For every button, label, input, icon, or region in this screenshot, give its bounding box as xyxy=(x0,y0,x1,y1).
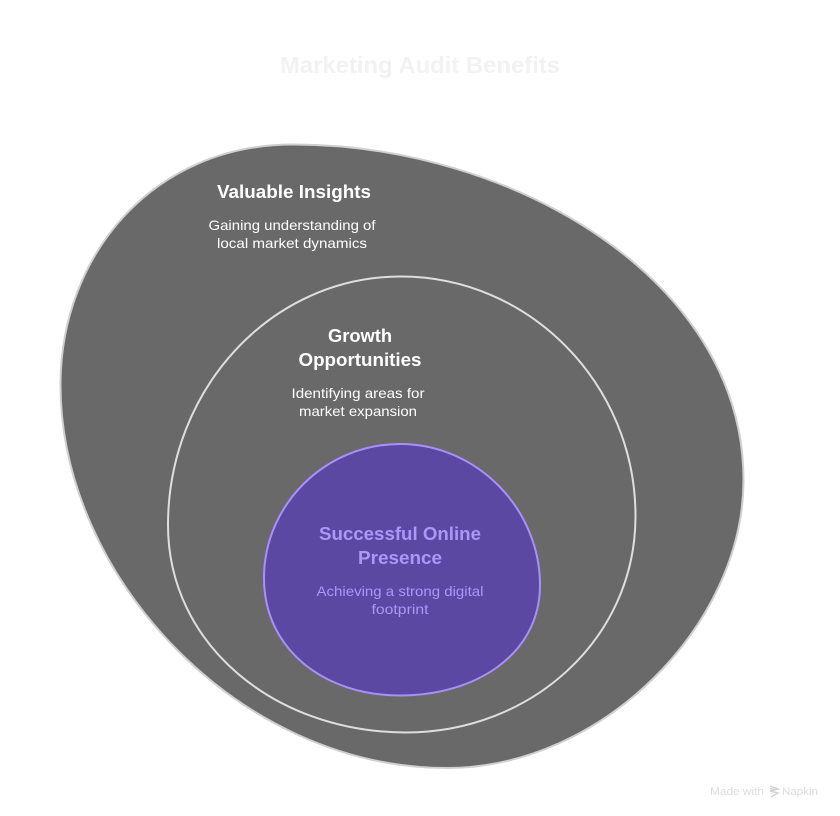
watermark: made with napkin xyxy=(710,786,818,798)
watermark: made with napkin: Made with xyxy=(710,786,764,798)
panel: growth opportunities middle blob xyxy=(168,276,636,733)
text: growth opportunities description: market expansion xyxy=(299,403,417,419)
text: valuable insights description: Gaining understanding of xyxy=(208,217,376,233)
panel: valuable insights outer blob xyxy=(60,144,744,768)
text: successful online presence description xyxy=(316,583,484,617)
text: growth opportunities description: Identifying areas for xyxy=(292,385,425,401)
heading: successful online presence: Successful Online xyxy=(319,524,481,544)
text: successful online presence description: footprint xyxy=(372,601,429,617)
heading: valuable insights: Valuable Insights xyxy=(217,182,371,202)
heading: successful online presence: Presence xyxy=(358,548,442,568)
text: growth opportunities description xyxy=(292,385,425,419)
panel: successful online presence inner blob xyxy=(264,444,540,696)
text: successful online presence description: Achieving a strong digital xyxy=(316,583,484,599)
heading: successful online presence xyxy=(319,524,481,568)
watermark: made with napkin: Napkin xyxy=(782,786,818,798)
text: valuable insights description xyxy=(208,217,376,251)
title: Marketing Audit Benefits xyxy=(280,52,560,78)
text: valuable insights description: local market dynamics xyxy=(217,235,367,251)
heading: growth opportunities: Growth xyxy=(328,326,392,346)
heading: growth opportunities xyxy=(298,326,422,370)
icon: napkin logo xyxy=(770,786,778,797)
heading: growth opportunities: Opportunities xyxy=(298,350,422,370)
